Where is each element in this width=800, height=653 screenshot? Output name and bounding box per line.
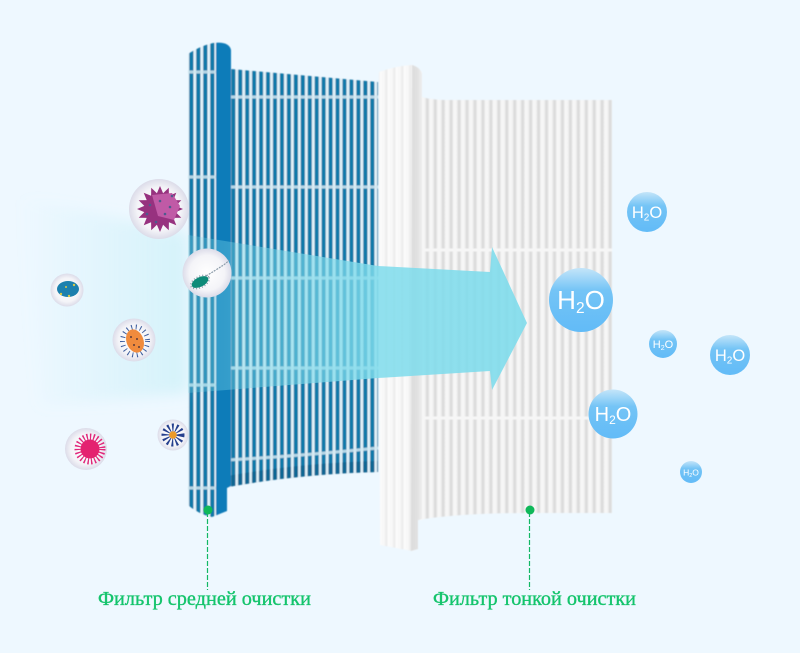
molecule: H2O right: H	[715, 347, 727, 365]
molecule: H2O medium: H	[595, 404, 609, 426]
filter pleats: fine, front section	[379, 65, 422, 551]
callout: fine filter: Фильтр тонкой очистки	[433, 589, 636, 610]
molecule: H2O small: 2	[661, 345, 665, 352]
panel: fine filter	[379, 65, 613, 551]
molecule: H2O right: O	[732, 347, 745, 365]
molecule: H2O right	[710, 335, 750, 375]
molecule: H2O small: O	[665, 339, 674, 351]
molecule: H2O small: H	[653, 339, 661, 351]
molecule: H2O large: O	[585, 285, 605, 315]
molecule: H2O medium: 2	[609, 413, 616, 427]
molecule: H2O medium	[588, 390, 638, 438]
molecule: H2O large: 2	[576, 300, 585, 317]
molecule: H2O medium: O	[616, 404, 631, 426]
molecule: H2O large	[549, 268, 613, 332]
molecule: H2O tiny: 2	[689, 473, 692, 479]
microbe: navy star cell	[158, 420, 188, 450]
molecule: H2O small	[649, 330, 677, 358]
molecule: H2O tiny	[680, 461, 702, 483]
molecule: H2O top: 2	[644, 212, 650, 224]
molecule: H2O large: H	[557, 285, 576, 315]
microbe: orange bacterium	[112, 318, 156, 362]
molecule: H2O top	[627, 192, 667, 232]
filter pleats: medium, front section	[188, 40, 231, 520]
molecule: H2O tiny: H	[683, 468, 689, 478]
microbe: pink virus	[65, 428, 107, 470]
filter pleats: medium, rear section	[228, 65, 379, 490]
callout: medium filter	[98, 506, 311, 610]
microbe: purple virus	[129, 179, 189, 239]
molecule: H2O top: H	[632, 204, 644, 222]
microbe: green bacterium	[182, 248, 232, 298]
microbe: blue cell	[50, 274, 84, 306]
haze: incoming air	[20, 198, 188, 406]
filter pleats: fine, rear section	[418, 95, 613, 521]
callout: medium filter: Фильтр средней очистки	[98, 589, 311, 610]
molecule: H2O top: O	[649, 204, 662, 222]
callout: fine filter	[433, 506, 636, 610]
panel: medium filter	[188, 40, 379, 520]
molecule: H2O right: 2	[727, 356, 733, 366]
molecule: H2O tiny: O	[692, 468, 699, 478]
arrow: air flow	[188, 235, 527, 393]
